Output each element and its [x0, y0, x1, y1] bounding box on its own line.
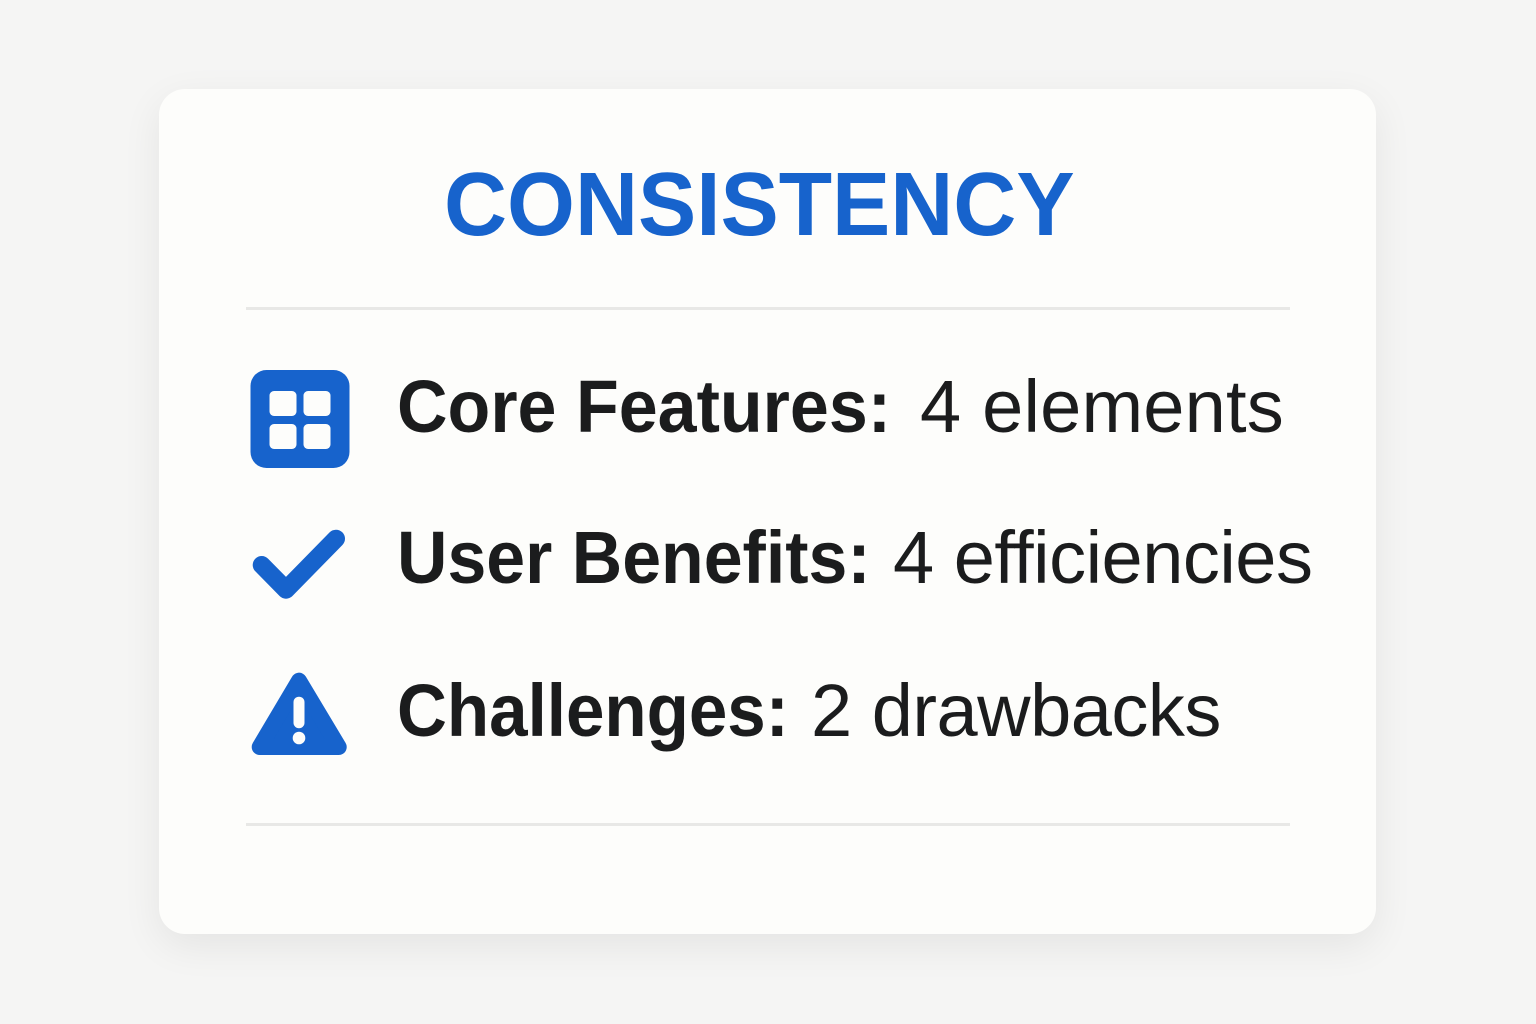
- panel: card: [159, 89, 1376, 934]
- text: user benefits: User Benefits:: [397, 516, 871, 599]
- title: CONSISTENCY: [444, 155, 1075, 255]
- text: user benefits: 4 efficiencies: [893, 516, 1312, 599]
- text: challenges: [397, 669, 1221, 752]
- icon: check mark: [252, 530, 345, 599]
- text: core features: 4 elements: [920, 365, 1284, 448]
- text: core features: Core Features:: [397, 365, 891, 448]
- text: challenges: 2 drawbacks: [811, 669, 1221, 752]
- icon: warning triangle: [252, 672, 347, 755]
- text: challenges: Challenges:: [397, 669, 789, 752]
- text: user benefits: [397, 516, 1312, 599]
- text: core features: [397, 365, 1284, 448]
- icon: grid: [250, 370, 350, 468]
